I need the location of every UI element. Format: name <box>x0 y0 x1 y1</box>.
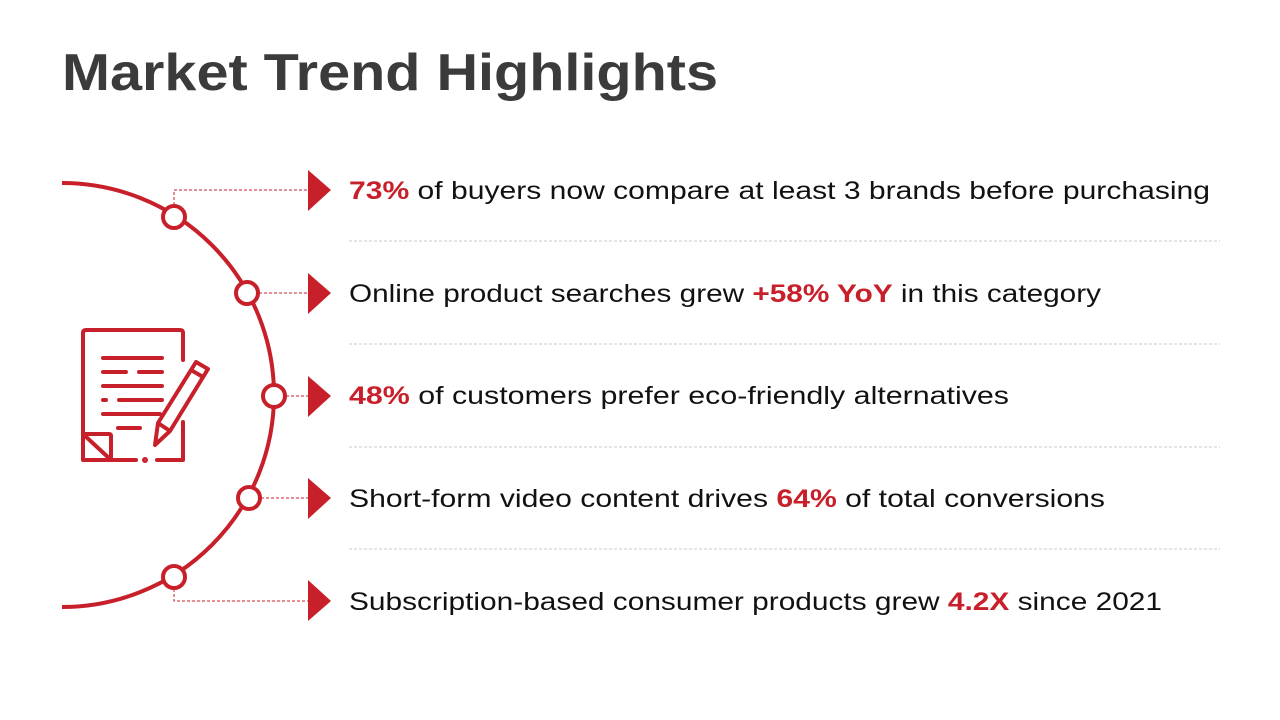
item 2: Online product searches grew +58% YoY in this category <box>349 280 1102 308</box>
title: Market Trend Highlights <box>62 44 718 102</box>
icon: document with pencil <box>83 330 208 461</box>
item 4: Short-form video content drives 64% of total conversions <box>349 485 1105 513</box>
item 1: 73% of buyers now compare at least 3 brands before purchasing <box>349 177 1210 205</box>
timeline arc <box>62 183 308 607</box>
item 3: 48% of customers prefer eco-friendly alternatives <box>349 382 1009 410</box>
separators <box>349 241 1220 549</box>
item 5: Subscription-based consumer products grew 4.2X since 2021 <box>349 588 1162 616</box>
arrows <box>308 170 331 621</box>
